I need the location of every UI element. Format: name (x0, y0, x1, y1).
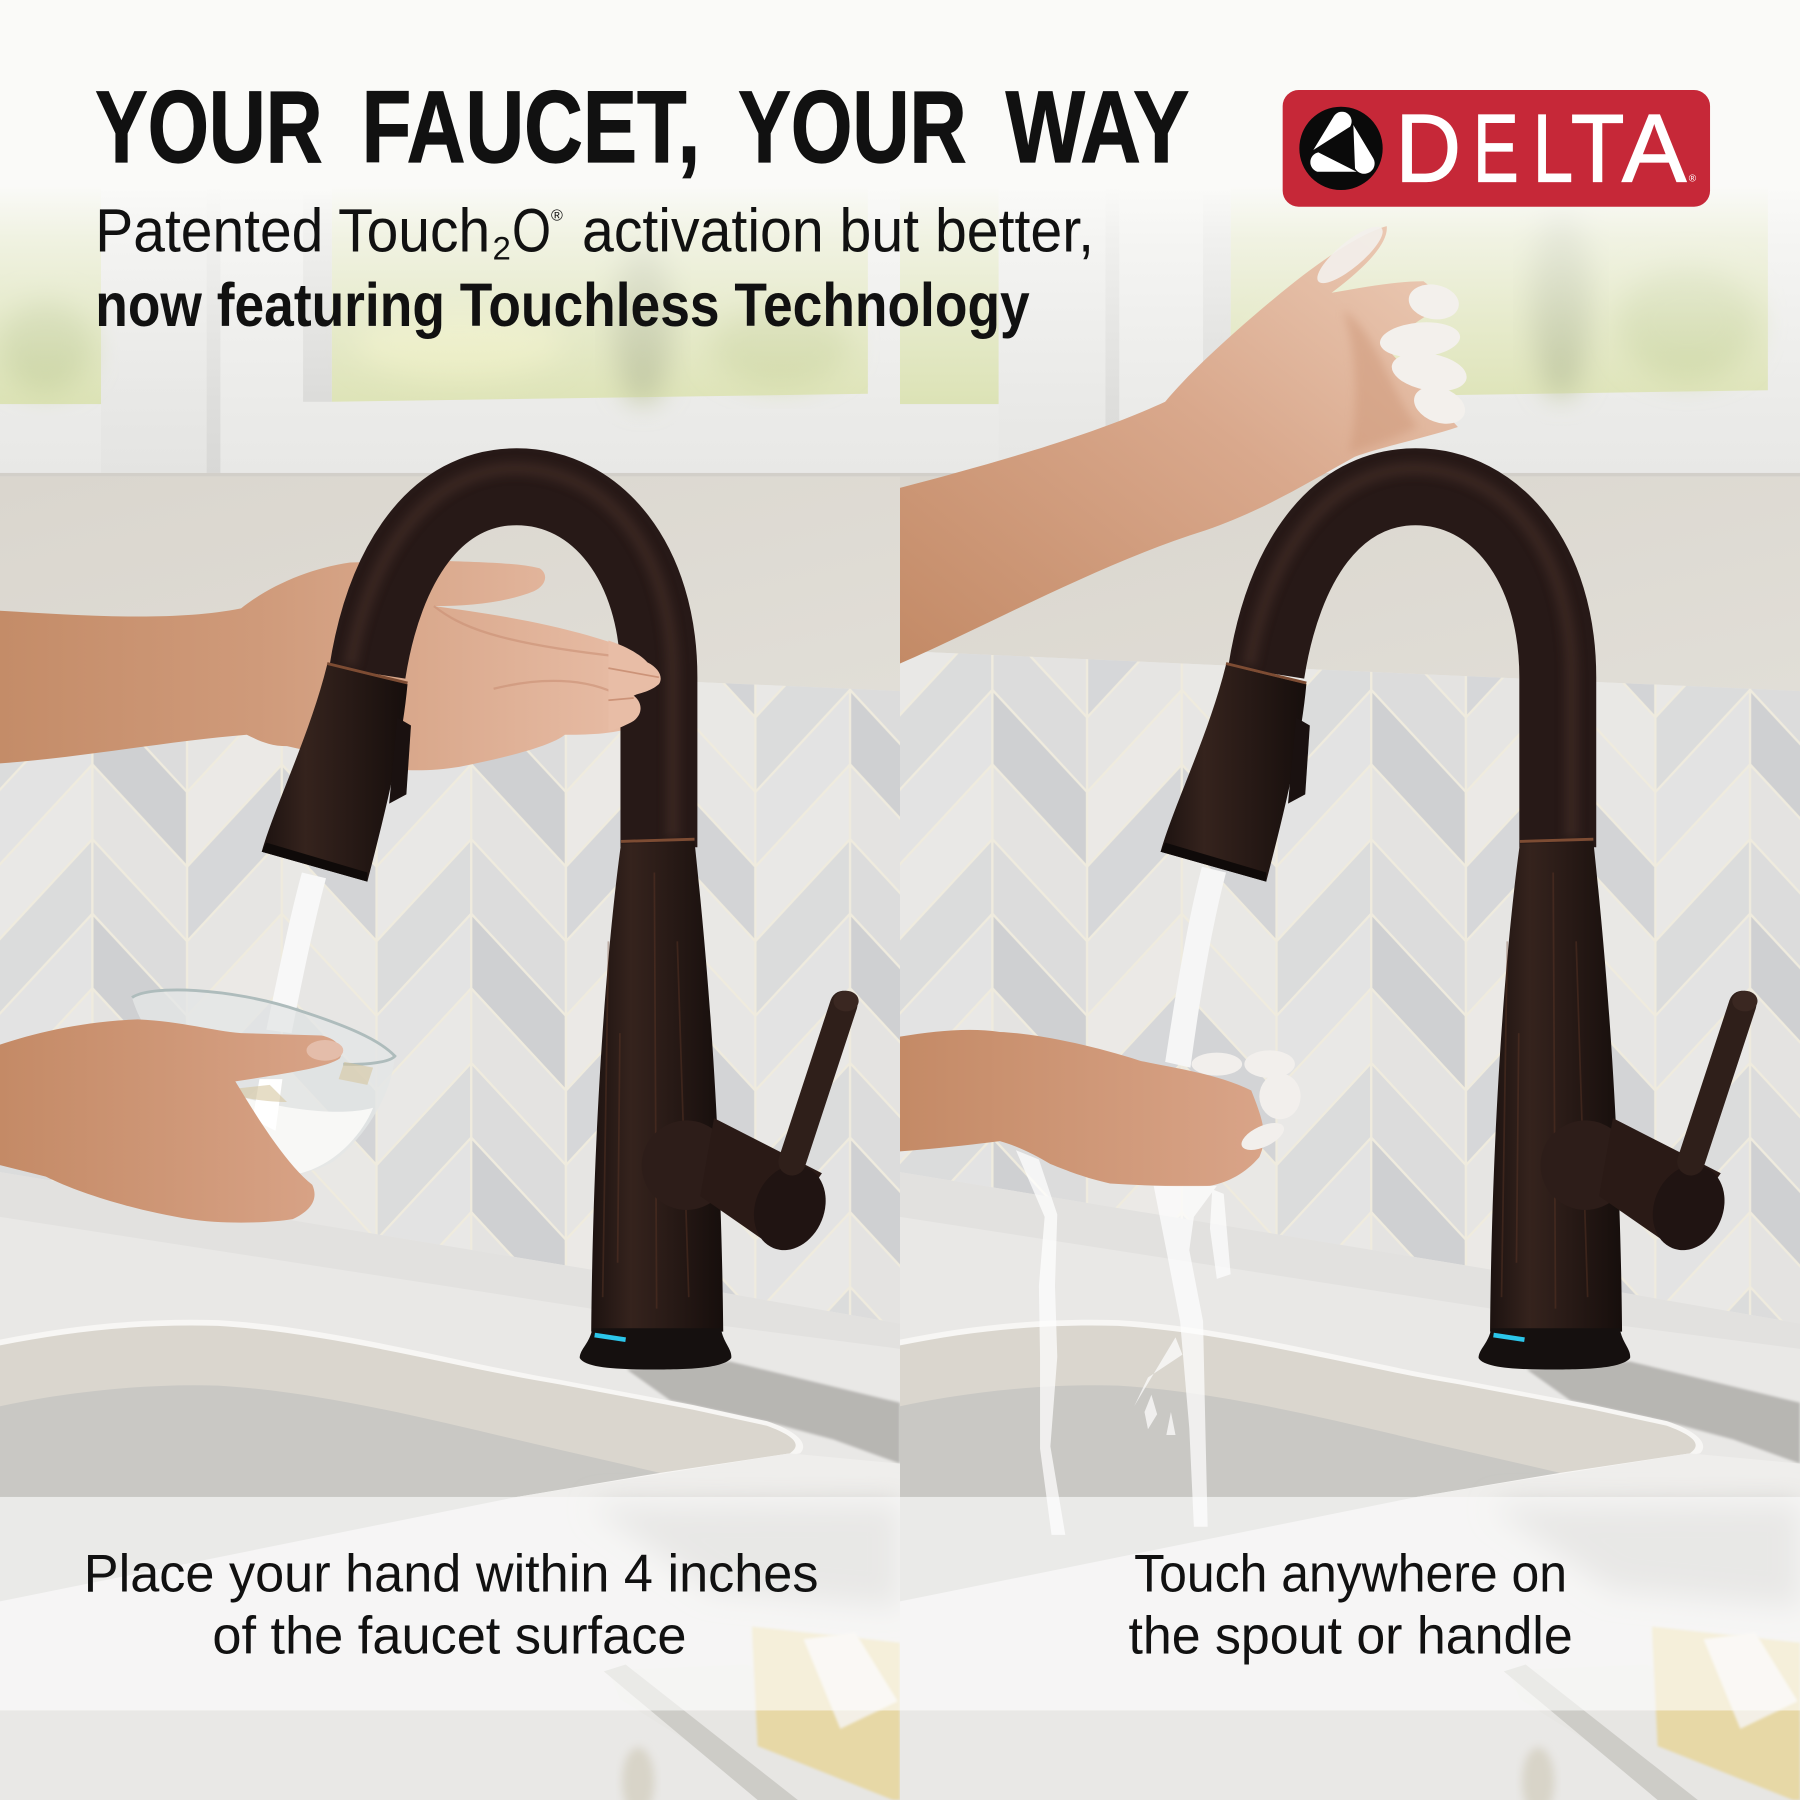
left scene: raised hand behind spout (0, 560, 643, 770)
window with garden view, right (900, 0, 1800, 476)
logo wordmark: A (1622, 95, 1687, 203)
subtitle line 1 (95, 196, 1094, 266)
logo wordmark: E (1473, 95, 1519, 203)
backsplash, wall and countertop, right (900, 473, 1800, 1800)
Delta logo (1283, 90, 1710, 207)
subtitle line 1: O (512, 196, 551, 264)
right lower hand under water (900, 1030, 1301, 1186)
caption: left (84, 1545, 818, 1666)
logo wordmark: L (1533, 95, 1573, 203)
logo emblem (1299, 107, 1383, 190)
splashing water (1016, 1150, 1231, 1535)
window with garden view, left (0, 0, 900, 476)
subtitle line 2: now featuring Touchless Technology (95, 271, 1030, 339)
title: WAY (1006, 70, 1189, 184)
title: FAUCET, (362, 70, 700, 184)
subtitle line 1: ® (551, 206, 563, 224)
caption band, right (900, 1497, 1800, 1710)
glass bowl with water (132, 990, 395, 1173)
caption: right: Touch anywhere on (1134, 1545, 1567, 1604)
logo wordmark: D (1395, 95, 1461, 203)
subtitle line 1: activation but better, (582, 196, 1094, 264)
foam on wet hand (1192, 1050, 1301, 1156)
subtitle line 1: 2 (492, 230, 511, 266)
left faucet (262, 468, 859, 1370)
caption: right (1128, 1545, 1573, 1666)
fingertips in front of spout (608, 641, 661, 731)
backsplash, wall and countertop, left (0, 473, 900, 1800)
thumbnail (307, 1040, 343, 1061)
left water stream (266, 872, 326, 1033)
logo wordmark: T (1571, 95, 1624, 203)
right water stream (1165, 867, 1226, 1068)
title: YOUR (738, 70, 967, 184)
logo wordmark (1395, 95, 1697, 203)
panel: touch activation scene (900, 0, 1800, 1800)
caption: left: Place your hand within 4 inches (84, 1545, 818, 1604)
caption: right: the spout or handle (1128, 1607, 1573, 1666)
title: YOUR (95, 70, 323, 184)
right upper hand touching spout (900, 219, 1470, 664)
logo wordmark: ® (1689, 173, 1697, 184)
caption: left: of the faucet surface (212, 1607, 686, 1666)
caption band, left (0, 1497, 900, 1710)
top fade overlay (0, 0, 1800, 476)
title (95, 70, 1189, 184)
left lower hand holding bowl (0, 1019, 341, 1223)
panel: hands-free activation scene (0, 0, 900, 1800)
foam on fingers (1310, 219, 1470, 430)
subtitle line 1: Patented Touch (95, 196, 490, 264)
right faucet (1161, 468, 1758, 1370)
